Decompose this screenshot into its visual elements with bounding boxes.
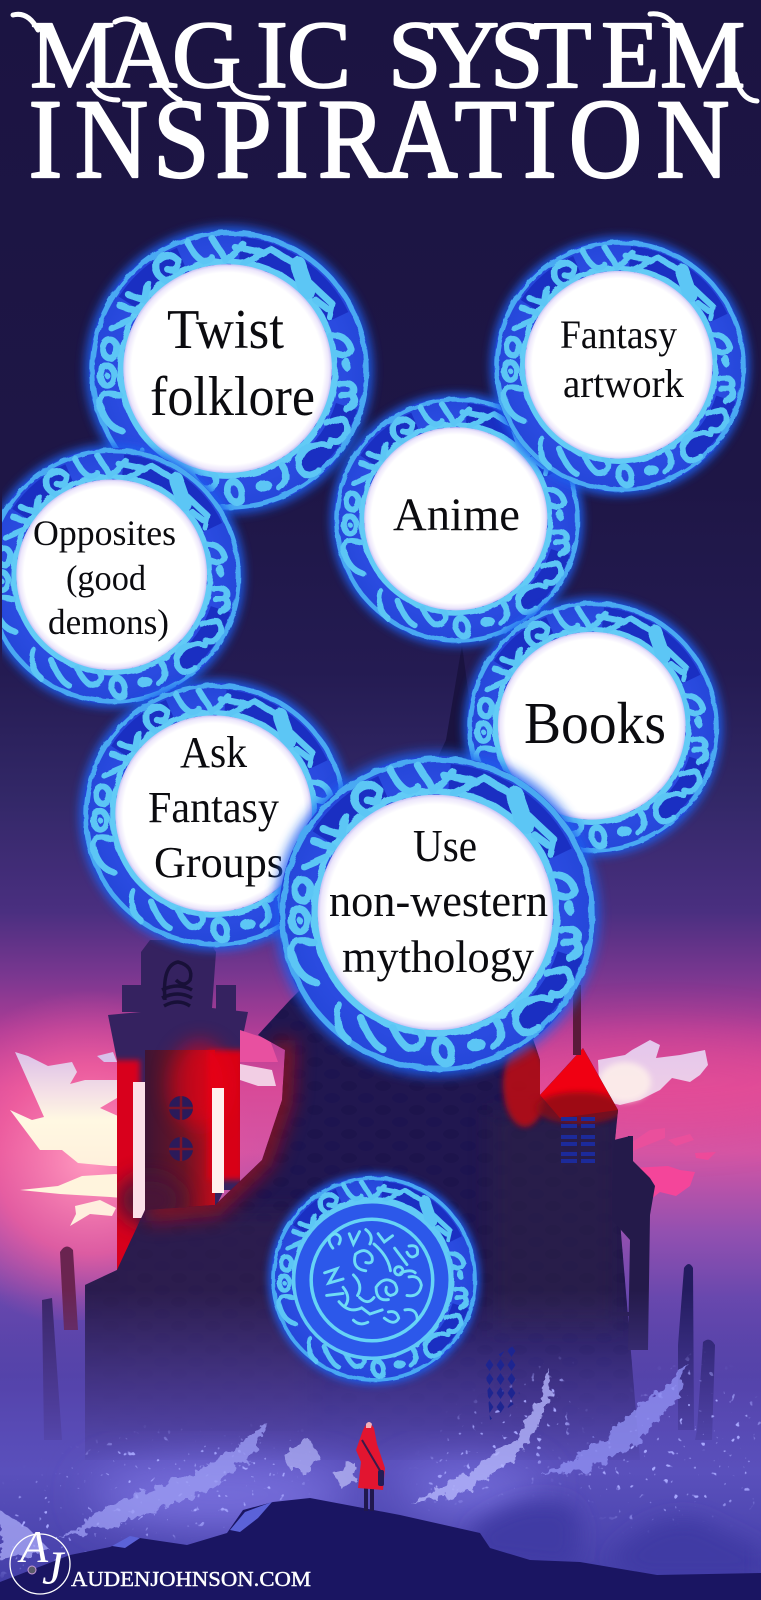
- sunset glow: [0, 980, 380, 1320]
- rune circle on tower: [268, 1173, 480, 1385]
- circle: Use non-western mythology: mythology: [342, 932, 534, 982]
- circle: Ask Fantasy Groups: Fantasy: [148, 783, 279, 832]
- clouds: left: [10, 1052, 145, 1226]
- tower: left lantern tower: [108, 940, 248, 1280]
- circle: Ask Fantasy Groups: Ask: [180, 728, 247, 777]
- title: INSPIRATION: [29, 77, 730, 202]
- website address: AUDENJOHNSON.COM: [71, 1567, 311, 1591]
- right pink sky band: [480, 1030, 761, 1130]
- icon: carved spiral on tower: [162, 962, 192, 1006]
- logo: AJ monogram: A: [17, 1521, 49, 1572]
- tower: central keep: [85, 991, 640, 1456]
- sea spray speckle: [0, 1354, 761, 1578]
- circle: Opposites (good demons): (good: [66, 558, 146, 598]
- title: MAGIC SYSTEM: [30, 1, 745, 108]
- rune lattice window: [485, 1345, 520, 1420]
- mid hills: [470, 1501, 761, 1580]
- sky strips between tower legs: [133, 1030, 278, 1218]
- circle: Fantasy artwork: artwork: [563, 361, 684, 406]
- circle: Use non-western mythology: non-western: [329, 876, 548, 926]
- circle: Fantasy artwork: Fantasy: [560, 312, 677, 357]
- circle: Anime: Anime: [393, 489, 520, 541]
- tower: left posts: [42, 1246, 78, 1440]
- icon: tower windows: [169, 1096, 193, 1161]
- figure: red cloaked traveller: [356, 1422, 385, 1511]
- circle: Books: Books: [524, 690, 666, 756]
- foreground hill: [0, 1498, 761, 1600]
- title: [13, 1, 757, 202]
- circle: Books: [463, 597, 723, 857]
- icon: right tower slatted window: [561, 1117, 595, 1163]
- tower: hidden roof spire between rings: [420, 645, 490, 800]
- title swashes: [13, 14, 757, 101]
- circle: Ask Fantasy Groups: [79, 679, 351, 951]
- circle: Opposites (good demons): Opposites: [33, 513, 176, 553]
- circle: Anime: [330, 393, 584, 647]
- tower: standing stones right: [678, 1264, 715, 1440]
- circle: Twist folklore: Twist: [167, 299, 284, 361]
- fog over tower base: [0, 1290, 761, 1473]
- sea spray streaks: [0, 1362, 687, 1560]
- circle: Opposites (good demons): [0, 444, 245, 708]
- mist glow: [90, 1463, 540, 1527]
- circle: Twist folklore: folklore: [150, 366, 315, 428]
- circle: Opposites (good demons): demons): [48, 602, 169, 642]
- circle: Fantasy artwork: [490, 236, 750, 496]
- circle: Twist folklore: [85, 226, 373, 514]
- circle: Use non-western mythology: Use: [413, 821, 477, 871]
- logo: AJ monogram: J: [42, 1542, 66, 1595]
- clouds: right: [598, 1040, 716, 1200]
- circle: Use non-western mythology: [274, 751, 600, 1077]
- tower: right spire and balcony: [573, 985, 655, 1350]
- circle: Ask Fantasy Groups: Groups: [154, 838, 284, 887]
- logo: AJ monogram: [10, 1521, 70, 1595]
